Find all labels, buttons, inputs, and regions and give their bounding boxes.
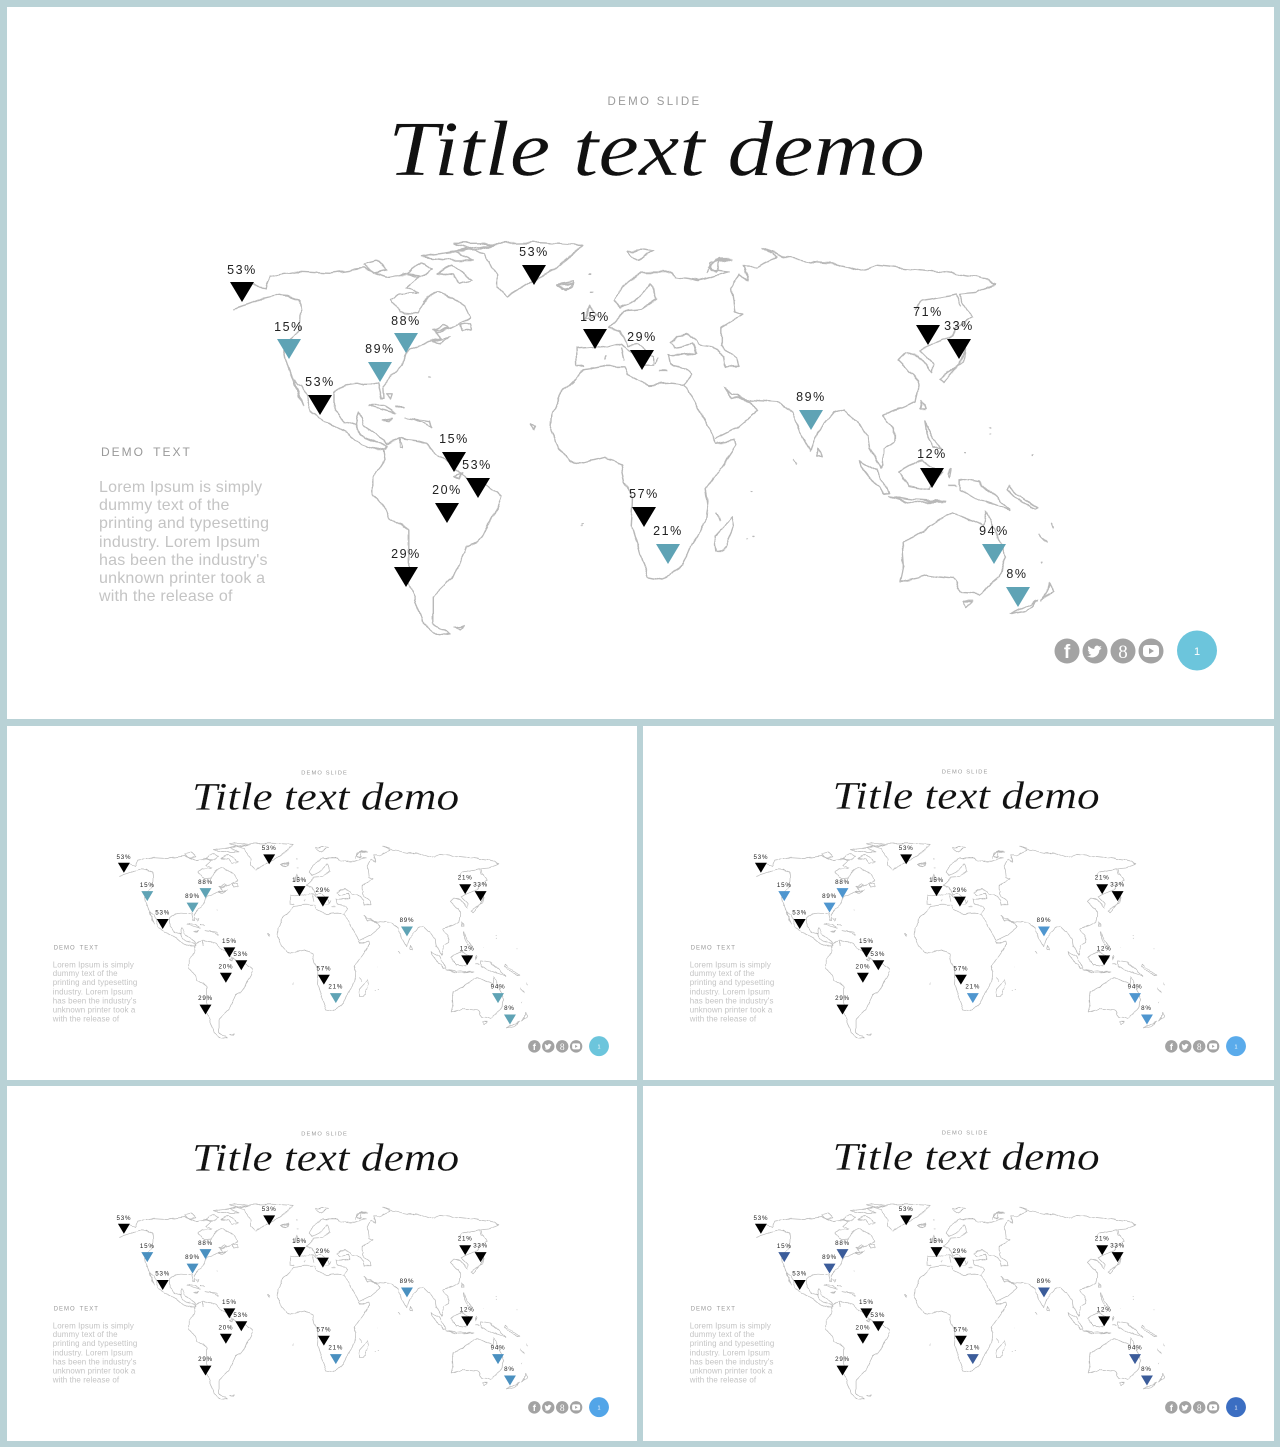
heading: variant 1: DEMO SLIDE [301, 771, 348, 777]
map and markers: variant 2: 57% [953, 965, 968, 972]
map and markers: variant 2: 15% [777, 882, 792, 889]
panel: slide variant 4 [643, 1086, 1274, 1441]
map and markers: variant 3: 15% [222, 1299, 237, 1306]
map and markers: variant 4: 33% [1110, 1243, 1125, 1250]
title: Title text demo [388, 105, 925, 192]
heading: variant 3: Title text demo [192, 1137, 459, 1180]
map and markers: variant 3: 94% [491, 1345, 505, 1352]
map and markers: variant 4: 29% [952, 1248, 967, 1255]
map and markers: variant 4: 15% [777, 1243, 792, 1250]
map and markers: variant 4: 94% [1128, 1345, 1142, 1352]
text block: demo text [98, 445, 269, 605]
map and markers: variant 3: 89% [185, 1254, 200, 1261]
map and markers: variant 1: 21% [458, 875, 473, 882]
map and markers: variant 1: 33% [473, 882, 488, 889]
map and markers: variant 2: 12% [1097, 945, 1112, 952]
map and markers: variant 2: 53% [792, 910, 807, 917]
map and markers: variant 4: 15% [929, 1238, 944, 1245]
map and markers: variant 3: 33% [473, 1243, 488, 1250]
map markers: 12% [917, 447, 947, 461]
map and markers: variant 3: 89% [400, 1278, 414, 1285]
map and markers: variant 2: 33% [1110, 882, 1125, 889]
map and markers: variant 1: 89% [185, 893, 200, 900]
map and markers: variant 1: 53% [155, 910, 170, 917]
map and markers: variant 1: 29% [315, 887, 330, 894]
map markers [227, 245, 1030, 607]
map and markers: variant 1: 53% [116, 854, 131, 861]
world map [233, 243, 1054, 636]
map and markers: variant 4: 20% [855, 1324, 870, 1331]
map and markers: variant 1: 89% [400, 917, 414, 924]
map markers: 21% [653, 524, 683, 538]
social icons [1054, 638, 1164, 664]
map and markers: variant 3: 15% [140, 1243, 155, 1250]
panel: slide variant 1 [7, 726, 637, 1080]
map and markers: variant 1: 20% [218, 963, 233, 970]
map markers: 89% [796, 390, 826, 404]
map and markers: variant 1: 12% [460, 945, 475, 952]
map and markers: variant 1: 53% [262, 845, 277, 852]
page number button: 1 [1194, 646, 1200, 658]
map and markers: variant 2: 53% [753, 854, 768, 861]
map and markers: variant 1: 88% [198, 879, 213, 886]
heading: variant 1: Title text demo [192, 776, 459, 819]
map markers: 33% [944, 319, 974, 333]
map and markers: variant 1: 8% [504, 1005, 515, 1012]
map and markers: variant 4: 12% [1097, 1306, 1112, 1313]
map and markers: variant 2 [689, 843, 1246, 1056]
map markers: 29% [391, 547, 421, 561]
eyebrow: demo slide: DEMO SLIDE [608, 96, 701, 108]
map and markers: variant 4: 1 [1234, 1405, 1238, 1411]
map markers: 89% [365, 342, 395, 356]
map and markers: variant 3: 8% [504, 1366, 515, 1373]
map markers: 15% [439, 432, 469, 446]
map markers: 53% [305, 375, 335, 389]
map and markers: variant 1: 21% [328, 984, 343, 991]
map and markers: variant 3 [52, 1204, 609, 1417]
map and markers: variant 1: 1 [597, 1044, 601, 1050]
map and markers: variant 2: 15% [929, 877, 944, 884]
map and markers: variant 4: 57% [953, 1326, 968, 1333]
map and markers: variant 4: 21% [965, 1345, 980, 1352]
map and markers: variant 4: 89% [1037, 1278, 1051, 1285]
map and markers: variant 2: 89% [822, 893, 837, 900]
map and markers: variant 3: 57% [316, 1326, 331, 1333]
map and markers: variant 2: 94% [1128, 984, 1142, 991]
map markers: 57% [629, 487, 659, 501]
page number button [1177, 630, 1217, 670]
panel: main slide [7, 7, 1274, 719]
map and markers: variant 4: 21% [1095, 1236, 1110, 1243]
map and markers: variant 3: 53% [262, 1206, 277, 1213]
map markers: 20% [432, 483, 462, 497]
map and markers: variant 2: 53% [899, 845, 914, 852]
map and markers: variant 4: 53% [753, 1215, 768, 1222]
map and markers: variant 2: 21% [965, 984, 980, 991]
map and markers: variant 4: 8% [1141, 1366, 1152, 1373]
map and markers: variant 1: 15% [222, 938, 237, 945]
map and markers: variant 3: 29% [315, 1248, 330, 1255]
map and markers: variant 2: 20% [855, 963, 870, 970]
map and markers: variant 4: 29% [835, 1356, 850, 1363]
heading: variant 3: DEMO SLIDE [301, 1132, 348, 1138]
panel: slide variant 2 [643, 726, 1274, 1080]
map and markers: variant 3: 21% [458, 1236, 473, 1243]
map markers: 88% [391, 314, 421, 328]
map and markers: variant 2: 89% [1037, 917, 1051, 924]
map and markers: variant 4: 53% [870, 1312, 885, 1319]
map and markers: variant 1: 57% [316, 965, 331, 972]
map and markers: variant 1: 15% [292, 877, 307, 884]
map and markers: variant 3: 53% [233, 1312, 248, 1319]
map and markers: variant 3: 15% [292, 1238, 307, 1245]
map markers: 71% [913, 305, 943, 319]
map and markers: variant 1: 94% [491, 984, 505, 991]
map markers: 53% [519, 245, 549, 259]
map and markers: variant 1 [52, 843, 609, 1056]
heading: variant 4: Title text demo [833, 1136, 1100, 1179]
map and markers: variant 2: 1 [1234, 1044, 1238, 1050]
map markers: 53% [227, 263, 257, 277]
map and markers: variant 3: 88% [198, 1240, 213, 1247]
map and markers: variant 4: 88% [835, 1240, 850, 1247]
heading: variant 2: DEMO SLIDE [942, 770, 988, 776]
map and markers: variant 3: 53% [116, 1215, 131, 1222]
map markers: 53% [462, 458, 492, 472]
map and markers: variant 2: 29% [952, 887, 967, 894]
map and markers: variant 4: 53% [899, 1206, 914, 1213]
map and markers: variant 1: 29% [198, 995, 213, 1002]
map and markers: variant 4 [689, 1204, 1246, 1417]
panel: slide variant 3 [7, 1086, 637, 1441]
map and markers: variant 4: 89% [822, 1254, 837, 1261]
map and markers: variant 3: 53% [155, 1271, 170, 1278]
map and markers: variant 4: 53% [792, 1271, 807, 1278]
map markers: 8% [1006, 567, 1028, 581]
map and markers: variant 2: 88% [835, 879, 850, 886]
heading: variant 4: DEMO SLIDE [942, 1131, 988, 1137]
map and markers: variant 2: 15% [859, 938, 874, 945]
map and markers: variant 2: 29% [835, 995, 850, 1002]
map and markers: variant 2: 53% [870, 951, 885, 958]
map and markers: variant 3: 12% [460, 1306, 475, 1313]
map and markers: variant 3: 1 [597, 1405, 601, 1411]
map and markers: variant 3: 20% [218, 1324, 233, 1331]
map and markers: variant 3: 21% [328, 1345, 343, 1352]
map and markers: variant 4: 15% [859, 1299, 874, 1306]
map markers: 15% [274, 320, 304, 334]
map markers: 29% [627, 330, 657, 344]
map and markers: variant 1: 53% [233, 951, 248, 958]
map and markers: variant 3: 29% [198, 1356, 213, 1363]
map and markers: variant 2: 21% [1095, 875, 1110, 882]
map and markers: variant 2: 8% [1141, 1005, 1152, 1012]
map markers: 94% [979, 524, 1009, 538]
map and markers: variant 1: 15% [140, 882, 155, 889]
map markers: 15% [580, 310, 610, 324]
heading: variant 2: Title text demo [833, 775, 1100, 818]
